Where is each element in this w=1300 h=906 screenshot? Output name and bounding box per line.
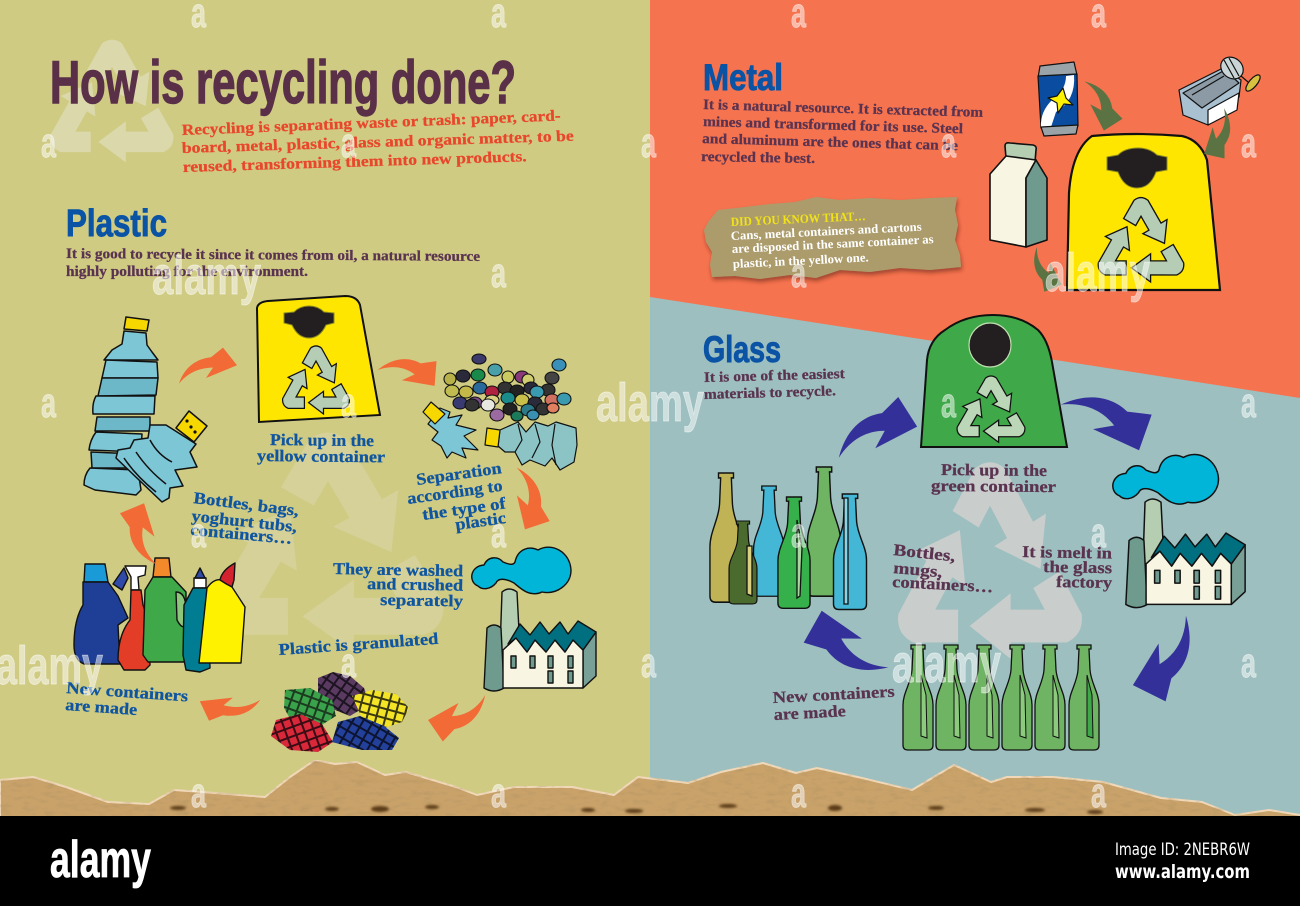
label: pick up in the yellow container: yellow container <box>257 446 385 466</box>
panel: metal background <box>650 0 1300 420</box>
watermarks: a <box>191 769 206 816</box>
text: metal description: recycled the best. <box>701 149 815 167</box>
intro text: Recycling is separating waste or trash: paper, card- <box>182 107 561 139</box>
arrow: separation to factory <box>503 468 560 535</box>
label: pick up in the green container: green container <box>931 476 1056 496</box>
callout: did you know that <box>704 197 961 279</box>
icon: pile of bottle caps <box>444 354 571 421</box>
watermarks: a <box>1241 379 1256 426</box>
label: it is melt in the glass factory: It is melt in <box>1022 542 1112 563</box>
watermarks: a <box>791 769 806 816</box>
intro text <box>182 107 574 176</box>
label: washed and crushed separately: They are washed <box>333 559 463 580</box>
label: it is melt in the glass factory: the glass <box>1043 557 1113 577</box>
watermarks: a <box>341 119 356 166</box>
watermarks: alamy <box>1045 243 1150 303</box>
label: pick up in the yellow container <box>257 430 385 466</box>
label: bottles, bags, yoghurt tubs, containers <box>190 488 300 548</box>
watermarks: a <box>191 509 206 556</box>
watermarks: a <box>491 509 506 556</box>
panel: glass background <box>650 297 1300 816</box>
icon: milk carton <box>990 143 1047 247</box>
label: new containers are made: New containers <box>66 678 189 706</box>
icon: row of green bottles <box>903 645 1099 750</box>
icon: cleaning product bottles <box>74 558 245 672</box>
label: separation according to the type of plastic: according to <box>406 476 504 508</box>
watermarks: a <box>1091 769 1106 816</box>
text: plastic description: It is good to recycle it since it comes from oil, a natural resource <box>66 246 481 265</box>
arrow: green container to factory <box>1061 364 1164 471</box>
icon: green container <box>921 315 1067 451</box>
watermarks: alamy <box>596 373 704 433</box>
heading: glass: Glass <box>703 329 781 370</box>
watermarks: a <box>791 509 806 556</box>
label: washed and crushed separately: separately <box>380 590 464 610</box>
watermarks: a <box>941 379 956 426</box>
text: metal description: and aluminum are the ones that can be <box>702 131 959 154</box>
label: bottles, bags, yoghurt tubs, containers: Bottles, bags, <box>193 488 300 520</box>
watermarks: alamy <box>892 634 1001 694</box>
icon: sardine tin <box>1179 53 1262 125</box>
title: How is recycling done? <box>50 49 516 116</box>
panel: plastic background <box>0 0 650 816</box>
arrow: new containers to bottles <box>112 499 167 564</box>
text: glass description: materials to recycle. <box>704 383 836 403</box>
text: metal description: mines and transformed for its use. Steel <box>703 114 963 137</box>
watermarks: a <box>941 119 956 166</box>
icon: group of assorted glass bottles <box>710 467 866 610</box>
watermarks: a <box>341 379 356 426</box>
label: bottles, bags, yoghurt tubs, containers: yoghurt tubs, <box>191 506 298 536</box>
text: metal description <box>701 97 983 167</box>
watermarks: alamy <box>0 636 103 696</box>
footer bar <box>0 816 1300 906</box>
label: it is melt in the glass factory: factory <box>1056 572 1113 592</box>
background recycling symbol: plastic cycle <box>181 432 463 682</box>
arrow: factory to granules <box>427 695 487 742</box>
watermarks: alamy <box>152 246 261 306</box>
callout: did you know that: Cans, metal containers and cartons <box>730 220 922 243</box>
icon: plastic granules <box>271 672 409 752</box>
label: plastic is granulated: Plastic is granulated <box>278 629 439 659</box>
watermarks: a <box>491 249 506 296</box>
watermarks: a <box>791 249 806 296</box>
arrow: new bottles to containers <box>795 596 888 697</box>
icon: crushed plastic bottle <box>84 317 207 502</box>
watermarks: a <box>341 639 356 686</box>
label: new containers are made <box>65 678 189 719</box>
label: it is melt in the glass factory <box>1022 542 1113 592</box>
watermarks: a <box>41 119 56 166</box>
text: metal description: It is a natural resource. It is extracted from <box>703 97 983 121</box>
icon: yellow container (metal) <box>1067 134 1220 293</box>
text: plastic description: highly polluting for the environment. <box>66 264 308 280</box>
label: new containers are made (glass): are made <box>773 701 846 724</box>
text: glass description <box>704 366 845 403</box>
icon: glass factory <box>1113 454 1245 608</box>
label: bottles, bags, yoghurt tubs, containers: containers… <box>190 520 293 548</box>
label: bottles, mugs, containers <box>892 540 994 596</box>
heading: metal: Metal <box>703 57 783 98</box>
label: separation according to the type of plastic: Separation <box>415 458 503 489</box>
footer url: www.alamy.com <box>1115 861 1250 883</box>
label: washed and crushed separately: and crushed <box>367 574 463 595</box>
icon: yellow container <box>257 296 380 423</box>
watermarks: a <box>641 119 656 166</box>
watermarks: a <box>1091 509 1106 556</box>
label: bottles, mugs, containers: mugs, <box>893 558 943 581</box>
text: plastic description <box>66 246 481 280</box>
label: separation according to the type of plastic <box>406 458 507 534</box>
icon: crushed bottles <box>423 402 577 470</box>
label: new containers are made (glass): New containers <box>772 682 896 707</box>
label: bottles, mugs, containers: Bottles, <box>893 540 956 565</box>
label: pick up in the yellow container: Pick up in the <box>270 430 374 450</box>
callout: did you know that: plastic, in the yellow one. <box>732 250 869 271</box>
label: separation according to the type of plastic: plastic <box>454 508 507 534</box>
watermarks: a <box>1241 639 1256 686</box>
watermarks: a <box>641 639 656 686</box>
arrow: yellow container to separation <box>377 336 447 403</box>
label: bottles, mugs, containers: containers… <box>892 572 994 596</box>
arrow: bottles to green container <box>839 397 917 458</box>
intro text: reused, transforming them into new products. <box>183 148 527 176</box>
watermarks: a <box>41 379 56 426</box>
arrow: factory to new bottles <box>1116 616 1218 712</box>
footer logo: alamy <box>50 831 151 889</box>
label: pick up in the green container: Pick up in the <box>941 460 1047 480</box>
background recycling symbol: title <box>34 40 184 178</box>
background recycling symbol: glass cycle <box>873 462 1098 684</box>
label: pick up in the green container <box>931 460 1056 496</box>
arrow: granules to new containers <box>196 685 260 732</box>
callout: did you know that: are disposed in the same container as <box>731 232 934 256</box>
intro text: board, metal, plastic, glass and organic matter, to be <box>182 128 574 157</box>
icon: drink can <box>1038 62 1078 136</box>
label: new containers are made: are made <box>65 695 138 719</box>
label: separation according to the type of plastic: the type of <box>421 493 507 524</box>
label: washed and crushed separately <box>333 559 464 610</box>
icon: plastic factory <box>472 547 596 691</box>
arrow: bottles to yellow container <box>179 348 237 384</box>
callout: did you know that: DID YOU KNOW THAT… <box>731 209 866 229</box>
watermarks: a <box>1241 119 1256 166</box>
watermarks: a <box>491 769 506 816</box>
heading: plastic: Plastic <box>66 203 167 245</box>
arrows: metal cycle <box>1018 81 1249 298</box>
label: new containers are made (glass) <box>772 682 896 724</box>
text: glass description: It is one of the easiest <box>704 366 845 386</box>
footer image id: Image ID: 2NEBR6W <box>1115 840 1250 860</box>
torn cardboard strip <box>0 760 1300 818</box>
